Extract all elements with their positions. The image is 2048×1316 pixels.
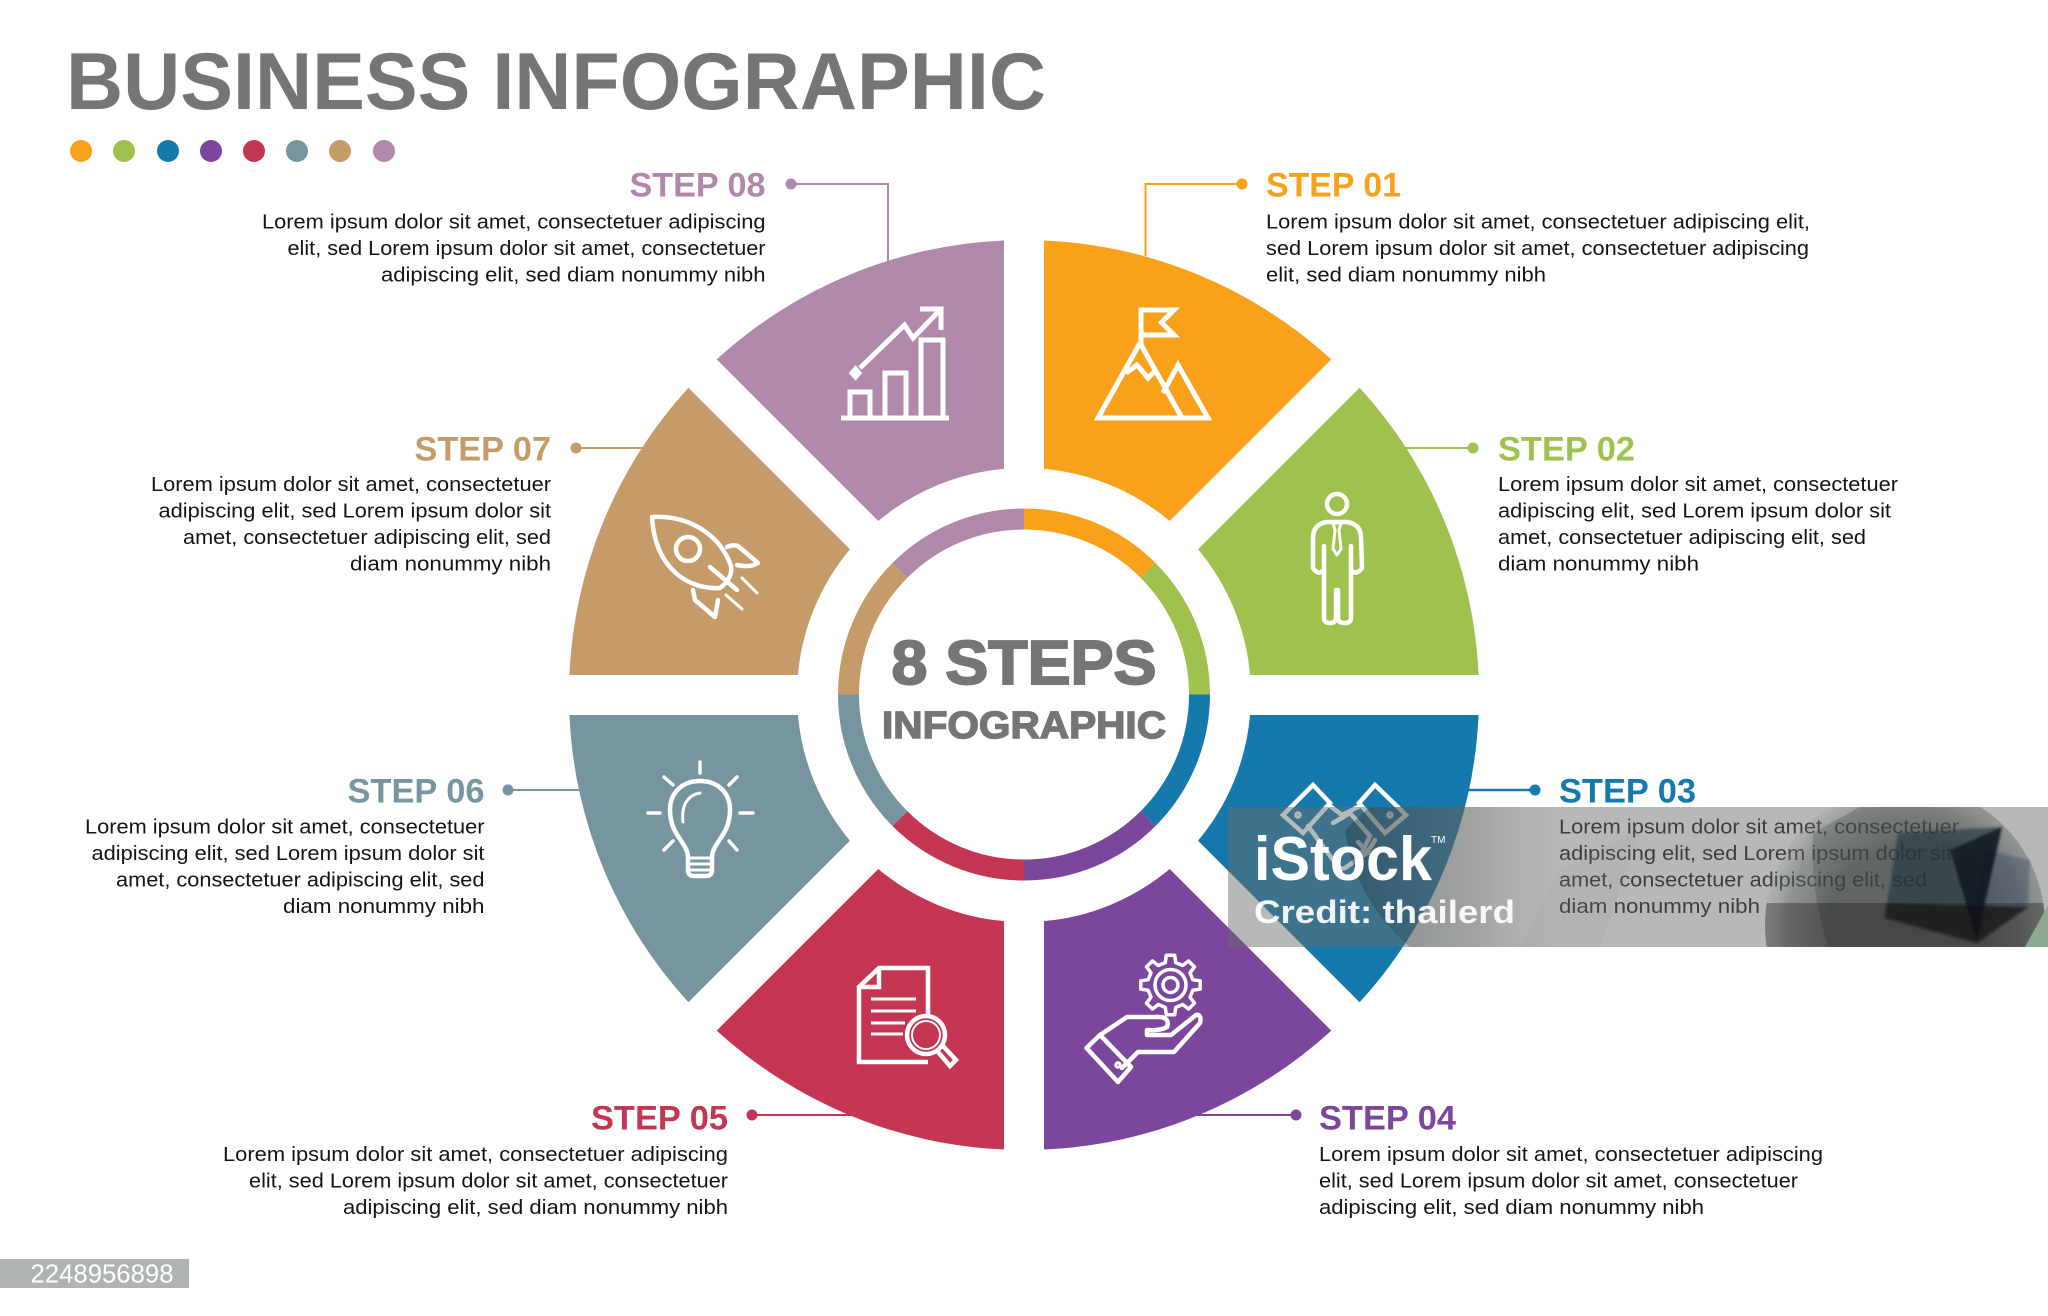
watermark credit: Credit: thailerd xyxy=(1254,894,1515,930)
centre title: INFOGRAPHIC xyxy=(882,705,1166,747)
panel: step 06 xyxy=(85,715,850,1002)
text: step 03: amet, consectetuer adipiscing elit, sed xyxy=(1559,869,1927,892)
text: step 03: Lorem ipsum dolor sit amet, consectetuer xyxy=(1559,816,1959,839)
connector: step 01 xyxy=(1146,178,1248,256)
wedge: step 04 xyxy=(1044,869,1331,1150)
text: step 02: amet, consectetuer adipiscing elit, sed xyxy=(1498,526,1866,549)
connector: step 04 xyxy=(1190,1110,1302,1120)
heading: step 04: STEP 04 xyxy=(1319,1100,1456,1138)
icon: growth chart xyxy=(841,309,949,418)
text: step 08: adipiscing elit, sed diam nonummy nibh xyxy=(381,264,766,287)
text: step 05: adipiscing elit, sed diam nonummy nibh xyxy=(343,1196,728,1219)
centre progress ring xyxy=(848,519,1200,870)
text: step 04: elit, sed Lorem ipsum dolor sit amet, consectetuer xyxy=(1319,1170,1798,1193)
text: step 03: diam nonummy nibh xyxy=(1559,895,1760,918)
connector: step 08 xyxy=(786,178,888,262)
wedge: step 05 xyxy=(717,869,1004,1150)
panel: step 03 xyxy=(1198,715,1959,1002)
text: step 05: Lorem ipsum dolor sit amet, consectetuer adipiscing xyxy=(223,1143,728,1166)
icon: handshake xyxy=(1283,785,1406,868)
text: step 02: adipiscing elit, sed Lorem ipsum dolor sit xyxy=(1498,500,1891,523)
icon: businessman xyxy=(1313,494,1362,623)
centre title: 8 STEPS xyxy=(892,629,1156,698)
panel: step 08 xyxy=(262,166,1004,521)
watermark logo: iStock xyxy=(1254,825,1432,894)
text: step 06: diam nonummy nibh xyxy=(283,895,484,918)
connector: step 06 xyxy=(502,784,585,796)
wedge: step 01 xyxy=(1044,240,1331,521)
text: step 01: Lorem ipsum dolor sit amet, consectetuer adipiscing elit, xyxy=(1266,211,1810,234)
text: step 06: amet, consectetuer adipiscing elit, sed xyxy=(116,869,484,892)
centre title xyxy=(882,629,1166,747)
heading: step 01: STEP 01 xyxy=(1266,166,1401,204)
heading: step 07: STEP 07 xyxy=(414,430,551,468)
wedge: step 07 xyxy=(569,388,850,675)
icon: hand holding gear xyxy=(1086,955,1200,1082)
text: step 04: Lorem ipsum dolor sit amet, consectetuer adipiscing xyxy=(1319,1143,1823,1166)
text: step 04 xyxy=(1319,1143,1823,1219)
panel: step 07 xyxy=(151,388,850,675)
watermark trademark: TM xyxy=(1431,835,1445,846)
text: step 03: adipiscing elit, sed Lorem ipsum dolor sit xyxy=(1559,842,1952,865)
icon: document with magnifier xyxy=(859,968,956,1066)
text: step 04: adipiscing elit, sed diam nonummy nibh xyxy=(1319,1196,1704,1219)
connector: step 05 xyxy=(746,1110,855,1120)
image id tag: 2248956898 xyxy=(30,1260,174,1288)
text: step 08: elit, sed Lorem ipsum dolor sit amet, consectetuer xyxy=(288,237,766,260)
text: step 02 xyxy=(1498,473,1898,576)
text: step 03 xyxy=(1559,816,1959,918)
panel: step 04 xyxy=(1044,869,1823,1219)
icon: mountain with flag xyxy=(1098,310,1208,418)
text: step 07 xyxy=(151,473,551,576)
heading: step 02: STEP 02 xyxy=(1498,430,1635,468)
text: step 07: amet, consectetuer adipiscing elit, sed xyxy=(183,526,551,549)
text: step 07: diam nonummy nibh xyxy=(350,553,551,576)
connector: step 07 xyxy=(570,442,645,454)
wedge: step 03 xyxy=(1198,715,1479,1002)
heading: step 08: STEP 08 xyxy=(630,166,766,204)
text: step 07: adipiscing elit, sed Lorem ipsum dolor sit xyxy=(158,500,551,523)
watermark band xyxy=(1228,807,2048,947)
text: step 05 xyxy=(223,1143,728,1219)
text: step 02: diam nonummy nibh xyxy=(1498,553,1699,576)
title: BUSINESS INFOGRAPHIC xyxy=(66,37,1046,127)
text: step 06: Lorem ipsum dolor sit amet, consectetuer xyxy=(85,816,485,839)
text: step 06: adipiscing elit, sed Lorem ipsum dolor sit xyxy=(92,842,485,865)
icon: light bulb xyxy=(648,762,753,876)
panel: step 02 xyxy=(1198,388,1898,675)
connector: step 02 xyxy=(1405,442,1478,454)
connector: step 03 xyxy=(1465,784,1540,796)
text: step 07: Lorem ipsum dolor sit amet, consectetuer xyxy=(151,473,551,496)
text: step 06 xyxy=(85,816,485,918)
heading: step 06: STEP 06 xyxy=(348,772,484,810)
text: step 05: elit, sed Lorem ipsum dolor sit amet, consectetuer xyxy=(249,1170,728,1193)
text: step 02: Lorem ipsum dolor sit amet, consectetuer xyxy=(1498,473,1898,496)
panel: step 05 xyxy=(223,869,1004,1219)
heading: step 05: STEP 05 xyxy=(591,1100,728,1138)
wedge: step 02 xyxy=(1198,388,1479,675)
heading: step 03: STEP 03 xyxy=(1559,772,1696,810)
text: step 01: sed Lorem ipsum dolor sit amet, consectetuer adipiscing xyxy=(1266,237,1809,260)
text: step 01 xyxy=(1266,211,1810,287)
wedge: step 06 xyxy=(569,715,850,1002)
text: step 08: Lorem ipsum dolor sit amet, consectetuer adipiscing xyxy=(262,211,766,234)
icon: rocket xyxy=(652,517,758,617)
text: step 08 xyxy=(262,211,766,287)
text: step 01: elit, sed diam nonummy nibh xyxy=(1266,264,1546,287)
wedge: step 08 xyxy=(717,240,1004,521)
legend colour dots xyxy=(70,140,395,162)
panel: step 01 xyxy=(1044,166,1810,521)
